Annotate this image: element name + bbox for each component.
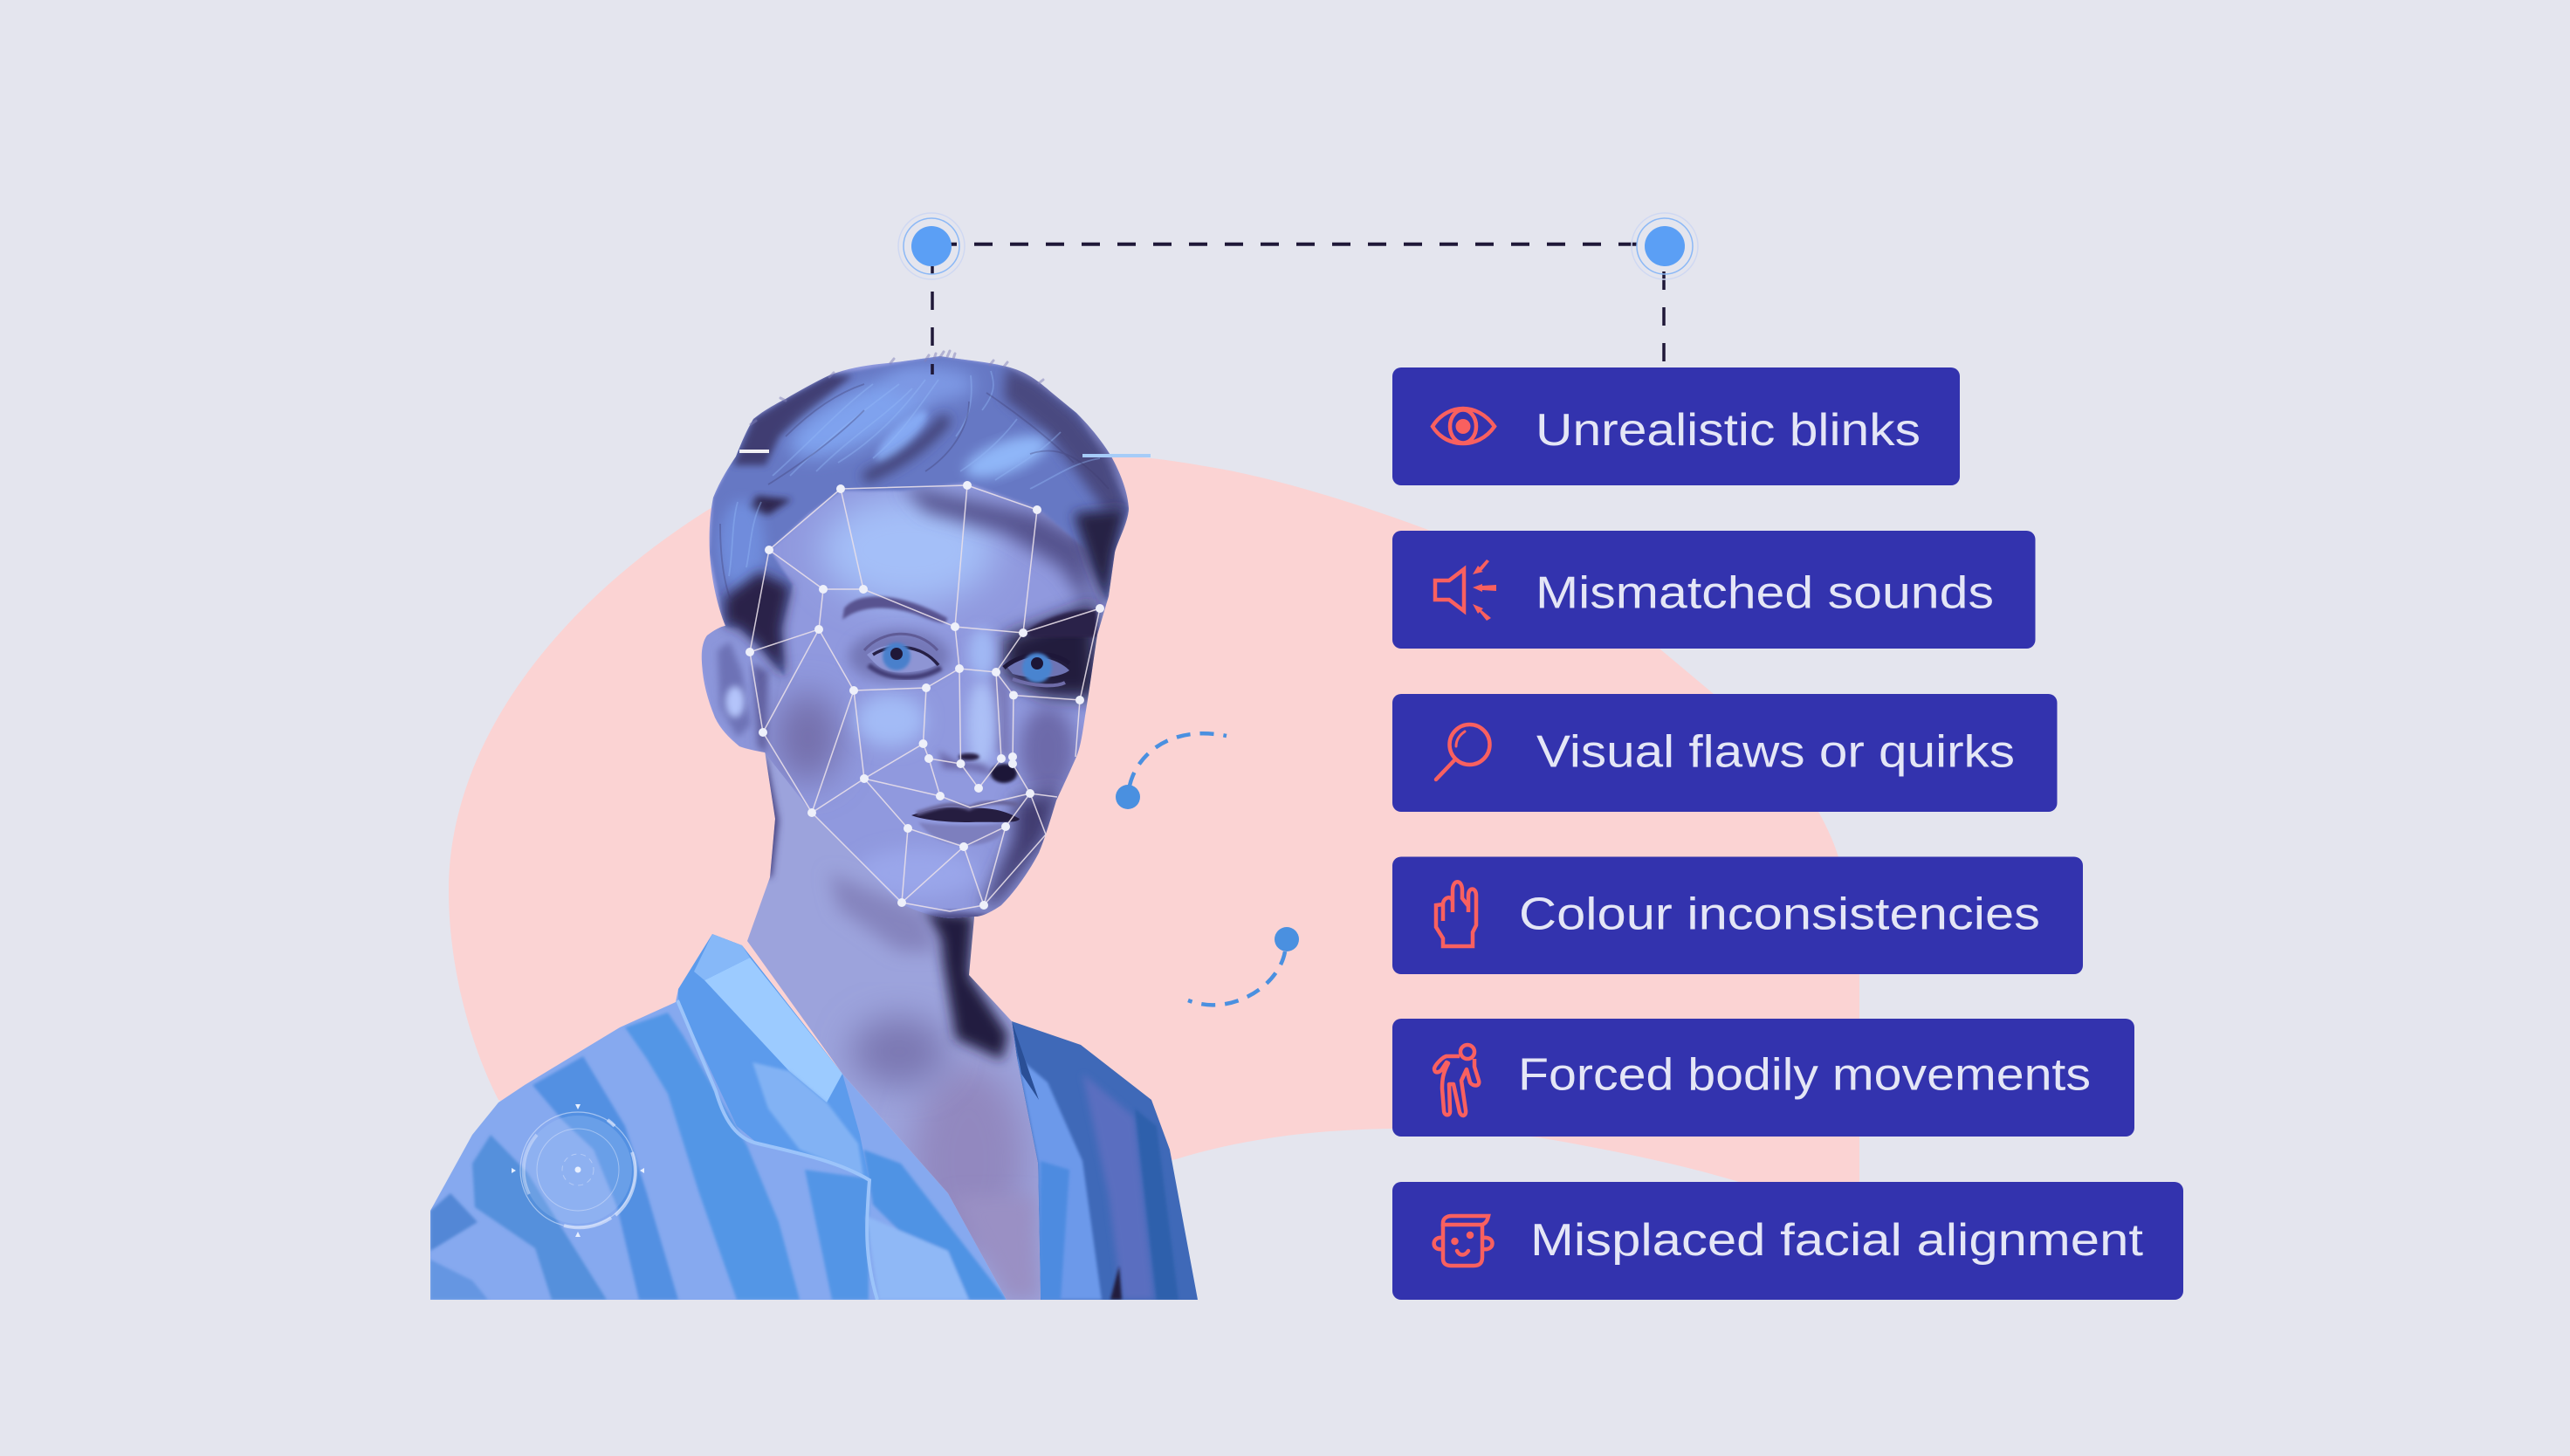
portrait: nose and mouth	[911, 753, 1020, 845]
portrait: left shirt	[430, 934, 1007, 1300]
portrait: eyes and brows	[842, 596, 1096, 685]
portrait: face mesh	[746, 481, 1104, 911]
icon: hand	[1436, 882, 1476, 946]
pink blob	[449, 436, 1859, 1240]
icon: eye	[1433, 409, 1495, 443]
pin: right node	[1632, 213, 1698, 279]
tick: blue head marker	[1082, 454, 1151, 457]
item: misplaced facial alignment	[1392, 1182, 2183, 1300]
item: unrealistic blinks	[1392, 367, 1960, 485]
item: mismatched sounds	[1392, 531, 2036, 649]
label: Misplaced facial alignment	[1530, 1215, 2144, 1266]
infographic canvas	[430, 212, 2183, 1300]
portrait: head	[690, 349, 1144, 925]
connector: top dashed line	[932, 244, 1664, 374]
portrait: neck and chest	[747, 752, 1041, 1300]
arc: lower blue dashed with dot	[1188, 927, 1299, 1005]
portrait: right shirt	[1012, 1021, 1198, 1300]
item: colour inconsistencies	[1392, 857, 2083, 974]
pin: left node	[898, 213, 965, 279]
icon: figure	[1434, 1045, 1479, 1116]
portrait: shirt lapel	[677, 934, 877, 1300]
arc: upper blue dashed with dot	[1116, 733, 1227, 809]
portrait: ear	[704, 625, 773, 752]
icon: face	[1434, 1216, 1493, 1266]
portrait: hair	[710, 356, 1129, 676]
icon: speaker	[1435, 560, 1496, 621]
icon: magnifier	[1436, 725, 1489, 780]
label: Mismatched sounds	[1536, 567, 1994, 618]
connector: top dashed head tick	[931, 364, 934, 374]
portrait: flyaway hair	[751, 351, 1043, 424]
item: visual flaws or quirks	[1392, 694, 2057, 812]
portrait: face shading	[774, 484, 1098, 924]
item: forced bodily movements	[1392, 1019, 2134, 1137]
label: Unrealistic blinks	[1536, 405, 1921, 456]
tick: white head marker	[739, 450, 769, 453]
label: Forced bodily movements	[1518, 1049, 2091, 1100]
label: Visual flaws or quirks	[1536, 726, 2015, 777]
portrait: person	[419, 349, 1213, 1309]
label: Colour inconsistencies	[1519, 889, 2040, 939]
portrait: hud circle on shoulder	[512, 1104, 644, 1237]
